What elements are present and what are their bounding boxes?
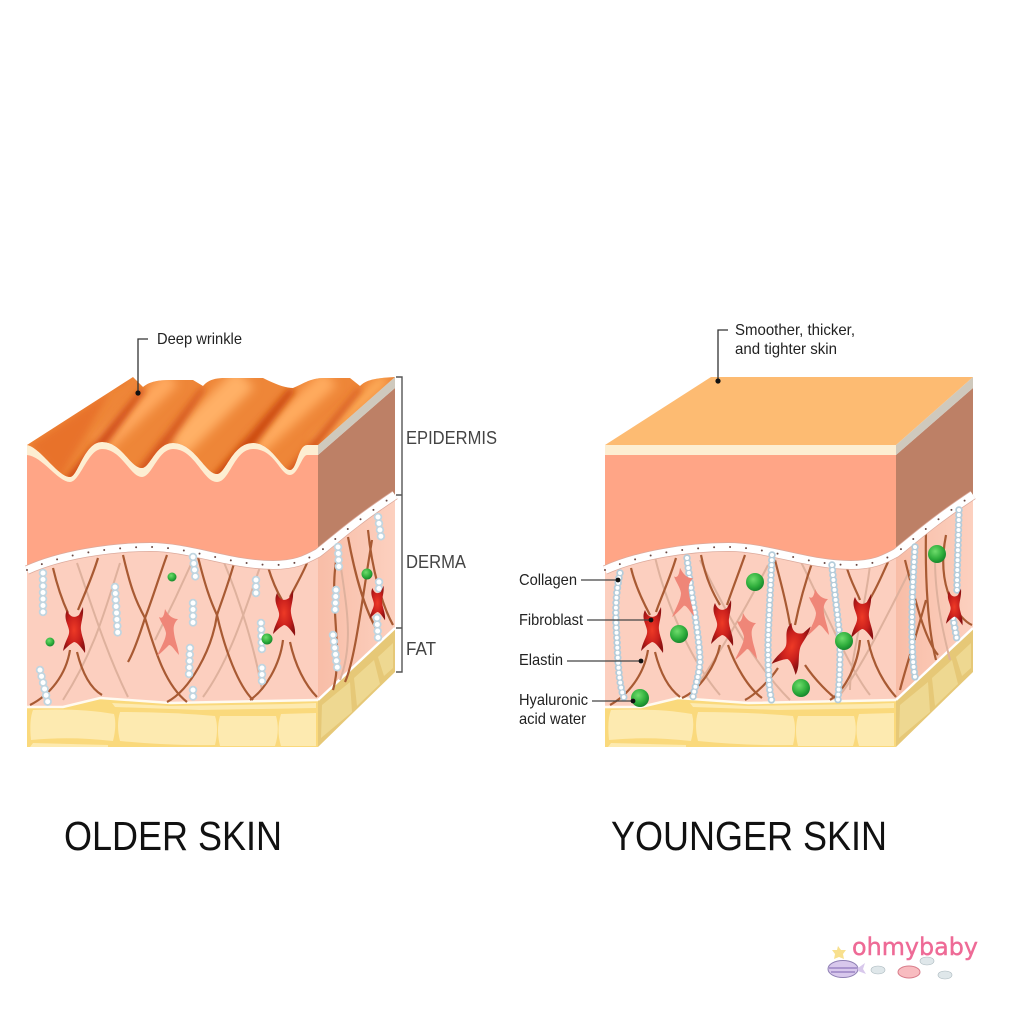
fibroblasts (63, 586, 385, 656)
label: collagen: Collagen (519, 572, 577, 589)
watermark: ohmybaby (828, 933, 978, 979)
label: hyaluronic acid water (519, 692, 635, 728)
membrane (605, 495, 973, 570)
hyaluronic spheres (631, 545, 946, 707)
epidermis cream edge (605, 445, 896, 455)
epidermis front face (27, 445, 318, 570)
panel: younger skin cube (605, 377, 973, 747)
callout: deep wrinkle (135, 331, 242, 396)
epidermis side face (318, 388, 395, 553)
label: elastin: Elastin (519, 652, 563, 669)
fat and dermis base (27, 495, 395, 747)
hyaluronic spheres (46, 568, 372, 646)
heading: older skin: OLDER SKIN (64, 813, 282, 859)
fat and dermis base (605, 495, 973, 747)
panel: older skin cube (20, 370, 400, 747)
label: hyaluronic acid water: acid water (519, 711, 587, 728)
label: fat: FAT (406, 639, 436, 659)
label: hyaluronic acid water: Hyaluronic (519, 692, 588, 709)
callout: smoother skin (715, 322, 855, 384)
callout: smoother skin: Smoother, thicker, (735, 322, 855, 339)
pale background elastin (655, 557, 950, 700)
epidermis front face (605, 455, 896, 570)
callout: smoother skin: and tighter skin (735, 341, 837, 358)
watermark: ohmybaby: ohmybaby (852, 933, 978, 961)
callout: deep wrinkle: Deep wrinkle (157, 331, 242, 348)
wavy epidermis cream edge (27, 442, 318, 482)
layer bracket (396, 377, 402, 672)
fibroblasts (641, 568, 963, 675)
elastin fibres (610, 530, 972, 705)
membrane (27, 495, 395, 570)
label: epidermis: EPIDERMIS (406, 428, 497, 448)
label: elastin (519, 652, 643, 669)
heading: younger skin: YOUNGER SKIN (611, 813, 887, 859)
label: fibroblast (519, 612, 653, 629)
smooth top surface (605, 377, 973, 445)
collagen strands (40, 517, 381, 703)
label: collagen (519, 572, 620, 589)
label: derma: DERMA (406, 552, 466, 572)
label: fibroblast: Fibroblast (519, 612, 584, 629)
epidermis side face (896, 388, 973, 553)
elastin fibres (30, 530, 393, 705)
collagen strands (616, 510, 959, 702)
pale background elastin (63, 560, 348, 700)
wrinkled top surface (27, 377, 395, 477)
